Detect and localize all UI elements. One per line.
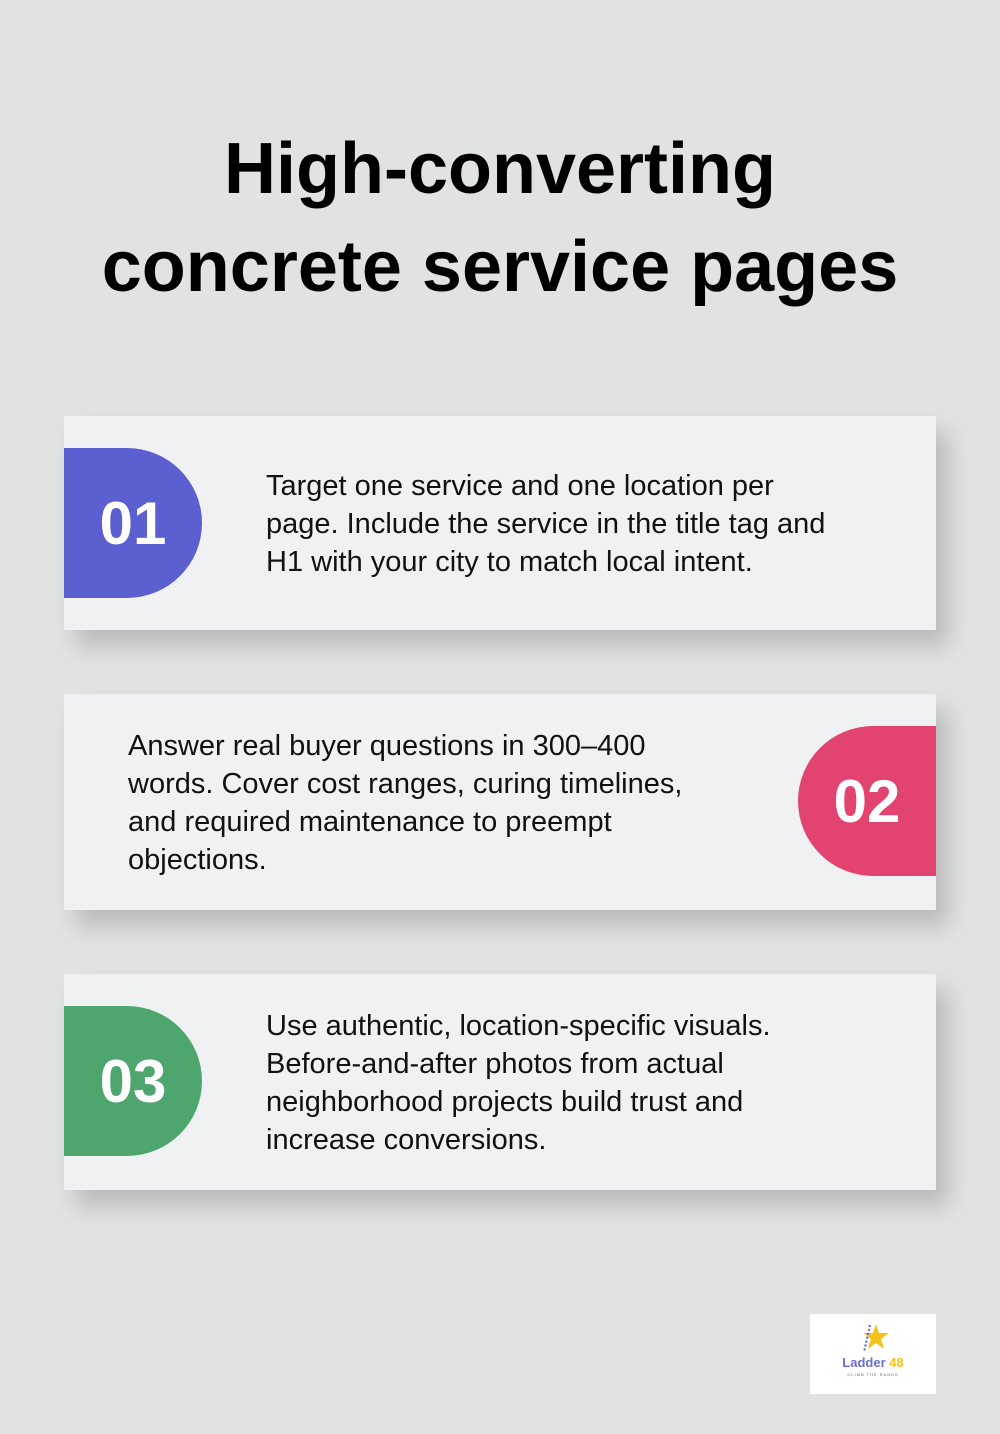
badge 03	[64, 1006, 202, 1156]
text 2: and required maintenance to preempt	[128, 806, 612, 838]
text 2: objections.	[128, 844, 267, 876]
text 1: Target one service and one location per	[266, 470, 774, 502]
title: concrete service pages	[102, 227, 898, 307]
badge 02	[798, 726, 936, 876]
panel: card 3	[64, 974, 936, 1190]
logo: CLIMB THE RANKS	[847, 1372, 899, 1377]
text 3: increase conversions.	[266, 1124, 546, 1156]
text 3: Use authentic, location-specific visuals.	[266, 1010, 771, 1042]
badge 01	[64, 448, 202, 598]
text 1: page. Include the service in the title tag and	[266, 508, 825, 540]
badge 03: 03	[100, 1048, 166, 1114]
badge 01: 01	[100, 490, 166, 556]
title: High-converting	[224, 129, 776, 209]
text 3	[266, 1010, 771, 1156]
text 2: Answer real buyer questions in 300–400	[128, 730, 646, 762]
text 2: words. Cover cost ranges, curing timelines,	[128, 768, 682, 800]
text 1: H1 with your city to match local intent.	[266, 546, 753, 578]
logo	[810, 1314, 936, 1394]
panel: card 1	[64, 416, 936, 630]
text 1	[266, 470, 825, 578]
title	[102, 129, 898, 307]
panel: card 2	[64, 694, 936, 910]
badge 02: 02	[834, 768, 900, 834]
text 2	[128, 730, 682, 876]
logo text: Ladder 48	[842, 1355, 904, 1370]
text 3: Before-and-after photos from actual	[266, 1048, 724, 1080]
text 3: neighborhood projects build trust and	[266, 1086, 743, 1118]
icon: ladder star	[863, 1324, 889, 1351]
